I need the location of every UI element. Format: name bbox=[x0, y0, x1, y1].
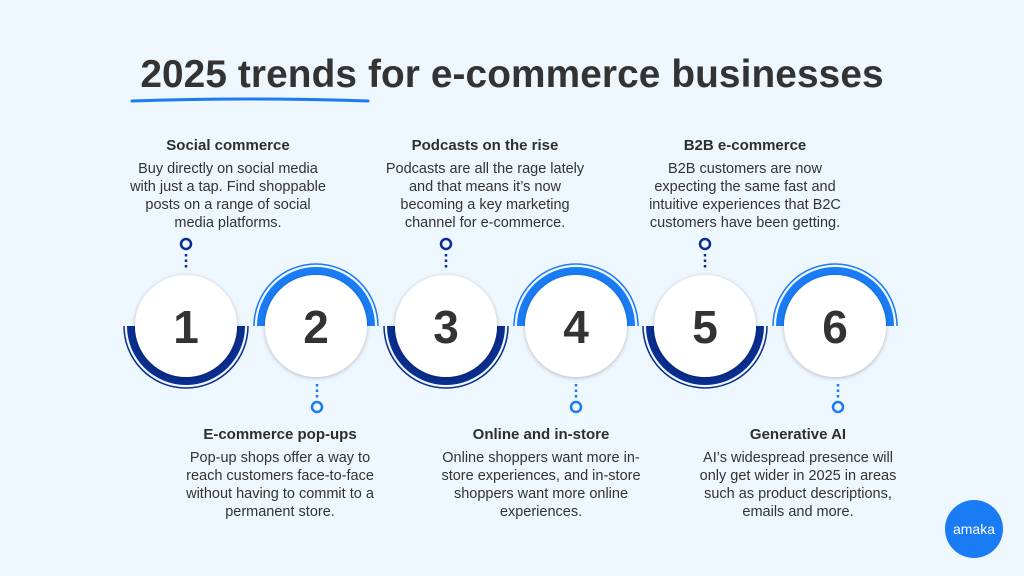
text: B2B: B2B e-commerce bbox=[684, 137, 806, 154]
step 4: 4 bbox=[563, 301, 589, 353]
step 3 bbox=[384, 239, 508, 388]
step 3: 3 bbox=[433, 301, 459, 353]
step 5 bbox=[643, 239, 767, 388]
text: social commerce: Social commerce bbox=[166, 137, 290, 154]
step 6 bbox=[773, 264, 897, 412]
step 5: 5 bbox=[692, 301, 718, 353]
title: 2025 trends for e-commerce businesses bbox=[140, 53, 884, 96]
step 2 bbox=[254, 264, 378, 412]
text: generative AI: AI’s widespread presence will only get wider in 2025 in areas such as product descriptions, emails and more. bbox=[700, 450, 896, 520]
step 2: 2 bbox=[303, 301, 329, 353]
text: online and in-store: Online shoppers want more in-store experiences, and in-store shoppers want more online experiences. bbox=[441, 450, 641, 520]
text: social commerce: Buy directly on social media with just a tap. Find shoppable posts on a range of social media platforms. bbox=[130, 161, 326, 231]
text: B2B: B2B customers are now expecting the same fast and intuitive experiences that B2C customers have been getting. bbox=[649, 161, 841, 231]
text: podcasts: Podcasts on the rise bbox=[412, 137, 558, 154]
logo bbox=[945, 500, 1003, 558]
title underline bbox=[130, 98, 370, 102]
step 1 bbox=[124, 239, 248, 388]
text: generative AI: Generative AI bbox=[750, 426, 846, 443]
step 4 bbox=[514, 264, 638, 412]
text: pop-ups: E-commerce pop-ups bbox=[203, 426, 357, 443]
logo: amaka bbox=[953, 521, 995, 537]
text: pop-ups: Pop-up shops offer a way to reach customers face-to-face without having to commit to a permanent store. bbox=[186, 450, 374, 520]
text: podcasts: Podcasts are all the rage lately and that means it’s now becoming a key marketing channel for e-commerce. bbox=[386, 161, 584, 231]
step 1: 1 bbox=[173, 301, 199, 353]
text: online and in-store: Online and in-store bbox=[473, 426, 609, 443]
step 6: 6 bbox=[822, 301, 848, 353]
